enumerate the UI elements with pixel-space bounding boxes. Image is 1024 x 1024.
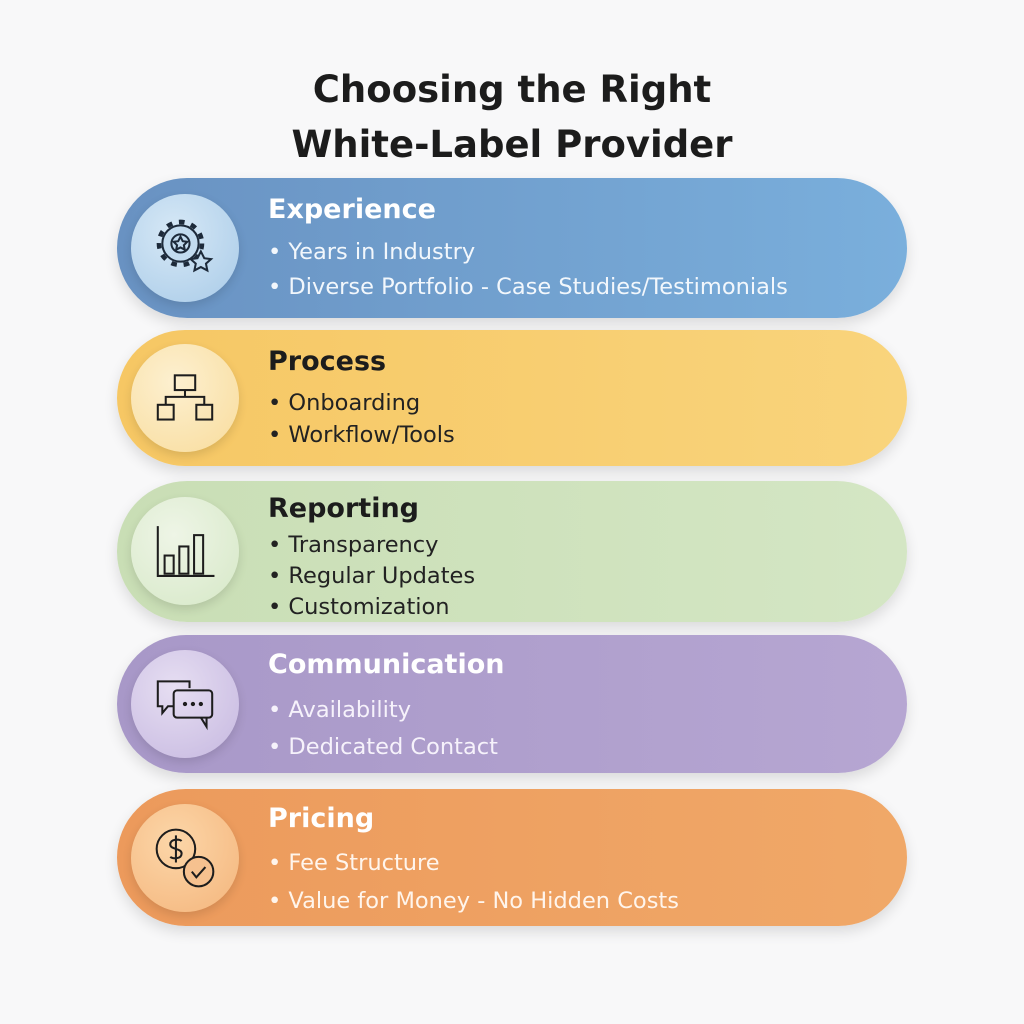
bullets: • Workflow/Tools: [268, 422, 455, 448]
bullets: • Fee Structure: [268, 850, 440, 876]
bullets: • Availability: [268, 697, 411, 723]
bullets: • Onboarding: [268, 390, 420, 416]
icon: chat bubbles: [131, 650, 239, 758]
bullets: [268, 390, 455, 448]
title: Choosing the Right: [313, 68, 711, 111]
title: [291, 68, 733, 166]
icon: flowchart: [131, 344, 239, 452]
panel: reporting: [117, 481, 907, 622]
bullets: • Customization: [268, 594, 450, 620]
icon: dollar check: [131, 804, 239, 912]
title: White-Label Provider: [291, 123, 733, 166]
heading: Pricing: [268, 803, 374, 834]
icon: gear star: [131, 194, 239, 302]
icon: bar chart: [131, 497, 239, 605]
bullets: • Years in Industry: [268, 239, 475, 265]
heading: Experience: [268, 194, 436, 225]
bullets: [268, 697, 498, 760]
bullets: • Diverse Portfolio - Case Studies/Testimonials: [268, 274, 788, 300]
panel: communication: [117, 635, 907, 773]
panel: experience: [117, 178, 907, 318]
heading: Reporting: [268, 493, 419, 524]
panel: process: [117, 330, 907, 466]
bullets: [268, 239, 788, 300]
bullets: • Value for Money - No Hidden Costs: [268, 888, 679, 914]
panel: pricing: [117, 789, 907, 926]
bullets: • Transparency: [268, 532, 438, 558]
heading: Communication: [268, 649, 504, 680]
bullets: • Dedicated Contact: [268, 734, 498, 760]
bullets: • Regular Updates: [268, 563, 475, 589]
heading: Process: [268, 346, 386, 377]
bullets: [268, 850, 679, 914]
bullets: [268, 532, 475, 620]
